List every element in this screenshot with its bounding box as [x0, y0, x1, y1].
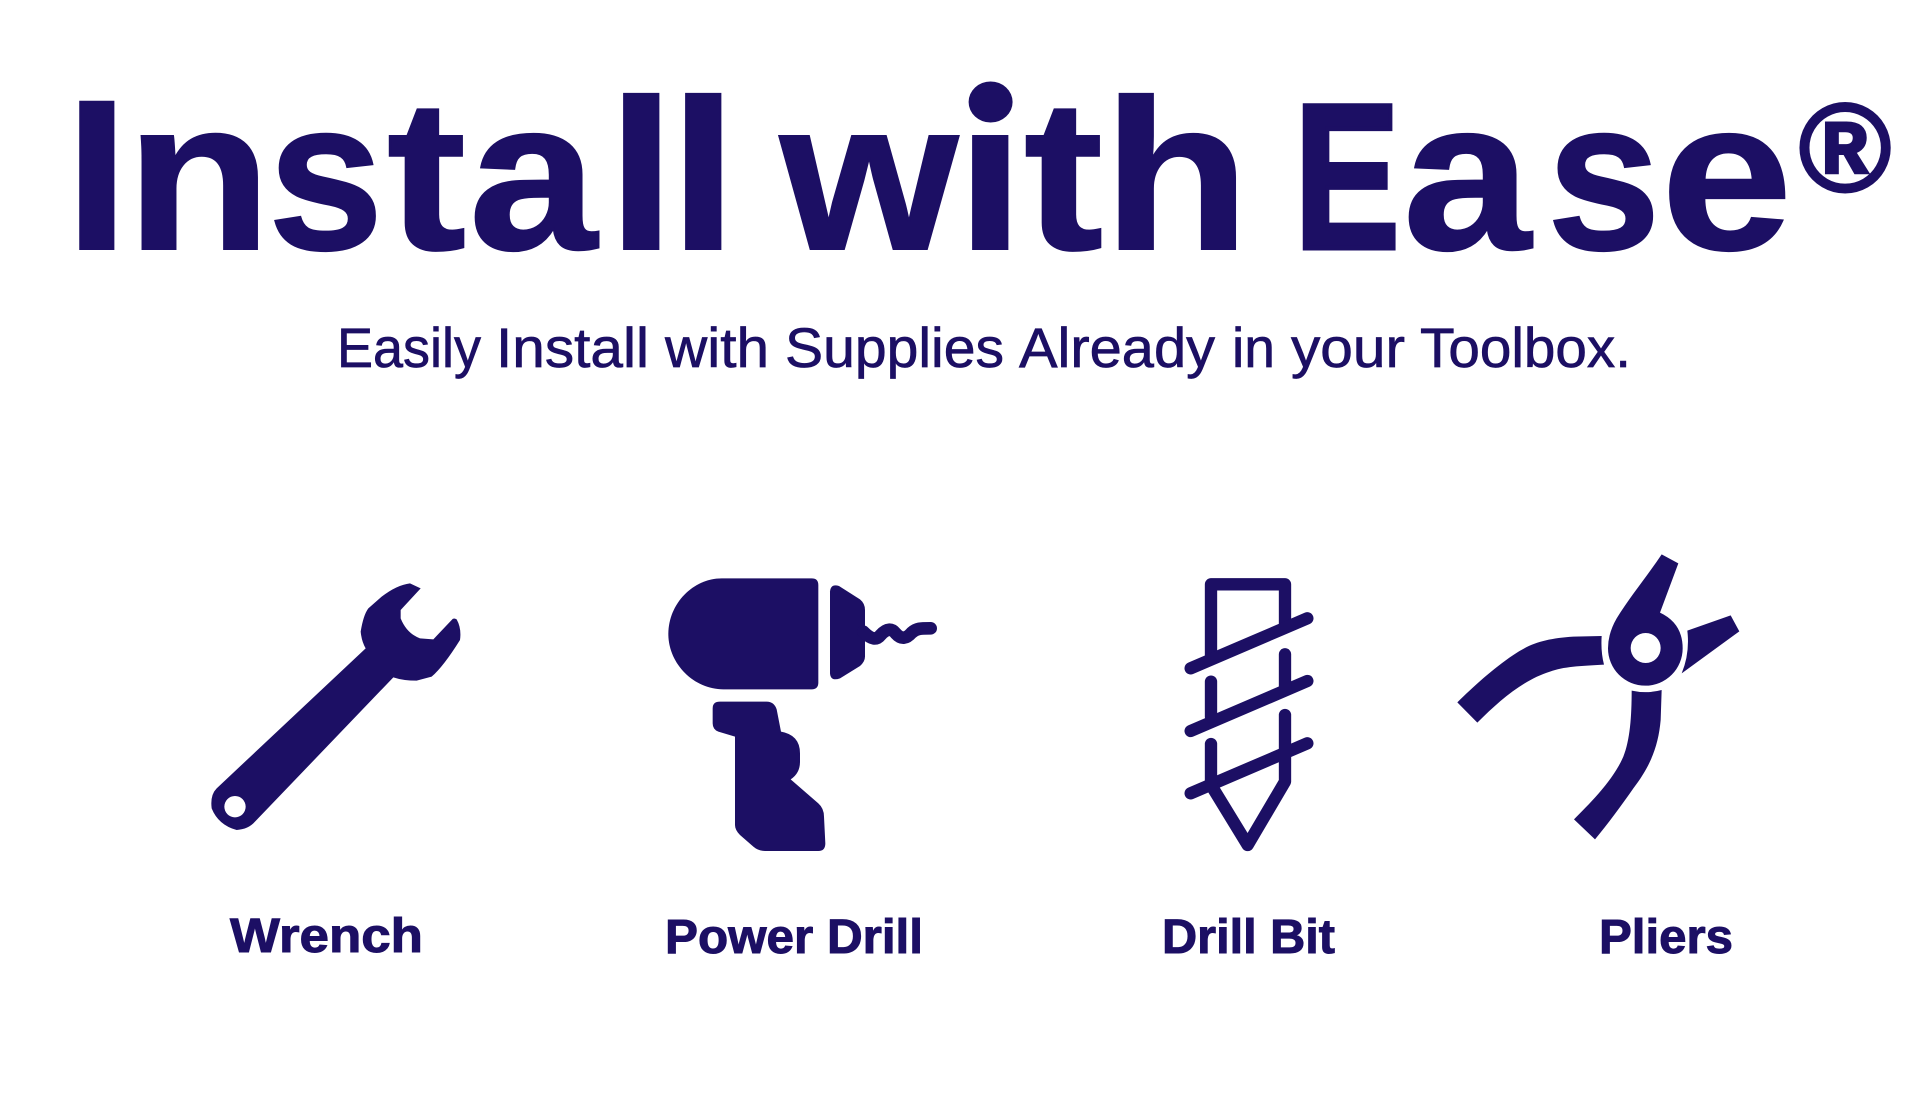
registered trademark symbol: ®: [1799, 79, 1891, 218]
icon: drill bit: [1191, 584, 1307, 845]
title: l: [607, 56, 676, 295]
subtitle: your: [1291, 316, 1405, 379]
label: drill bit: Drill Bit: [1162, 911, 1335, 964]
icon: power drill: [668, 578, 931, 851]
title: i: [956, 56, 1025, 295]
subtitle: with: [664, 316, 769, 379]
title: a: [469, 56, 597, 295]
title: a: [1403, 56, 1531, 295]
label: wrench: Wrench: [230, 910, 423, 963]
title: h: [1103, 56, 1250, 295]
subtitle: Supplies: [785, 316, 1004, 379]
title: s: [268, 56, 383, 295]
title: E: [1294, 61, 1400, 292]
title: t: [1024, 56, 1103, 295]
title: e: [1661, 56, 1792, 295]
icon: wrench: [211, 583, 460, 830]
label: power drill: Power Drill: [665, 911, 923, 964]
subtitle: Easily: [337, 316, 481, 379]
label: pliers: Pliers: [1599, 911, 1733, 964]
title: l: [669, 56, 738, 295]
subtitle: in: [1232, 316, 1275, 379]
subtitle: [337, 316, 1631, 379]
subtitle: Already: [1019, 316, 1215, 379]
title: n: [126, 56, 272, 295]
title i dot: [966, 82, 1014, 130]
subtitle: Toolbox.: [1420, 316, 1631, 379]
title: t: [386, 56, 466, 295]
icon: pliers: [1457, 554, 1739, 839]
subtitle: Install: [496, 316, 649, 379]
title: [65, 56, 1792, 295]
title: s: [1547, 56, 1660, 295]
title: w: [780, 56, 959, 295]
title: I: [65, 56, 128, 295]
